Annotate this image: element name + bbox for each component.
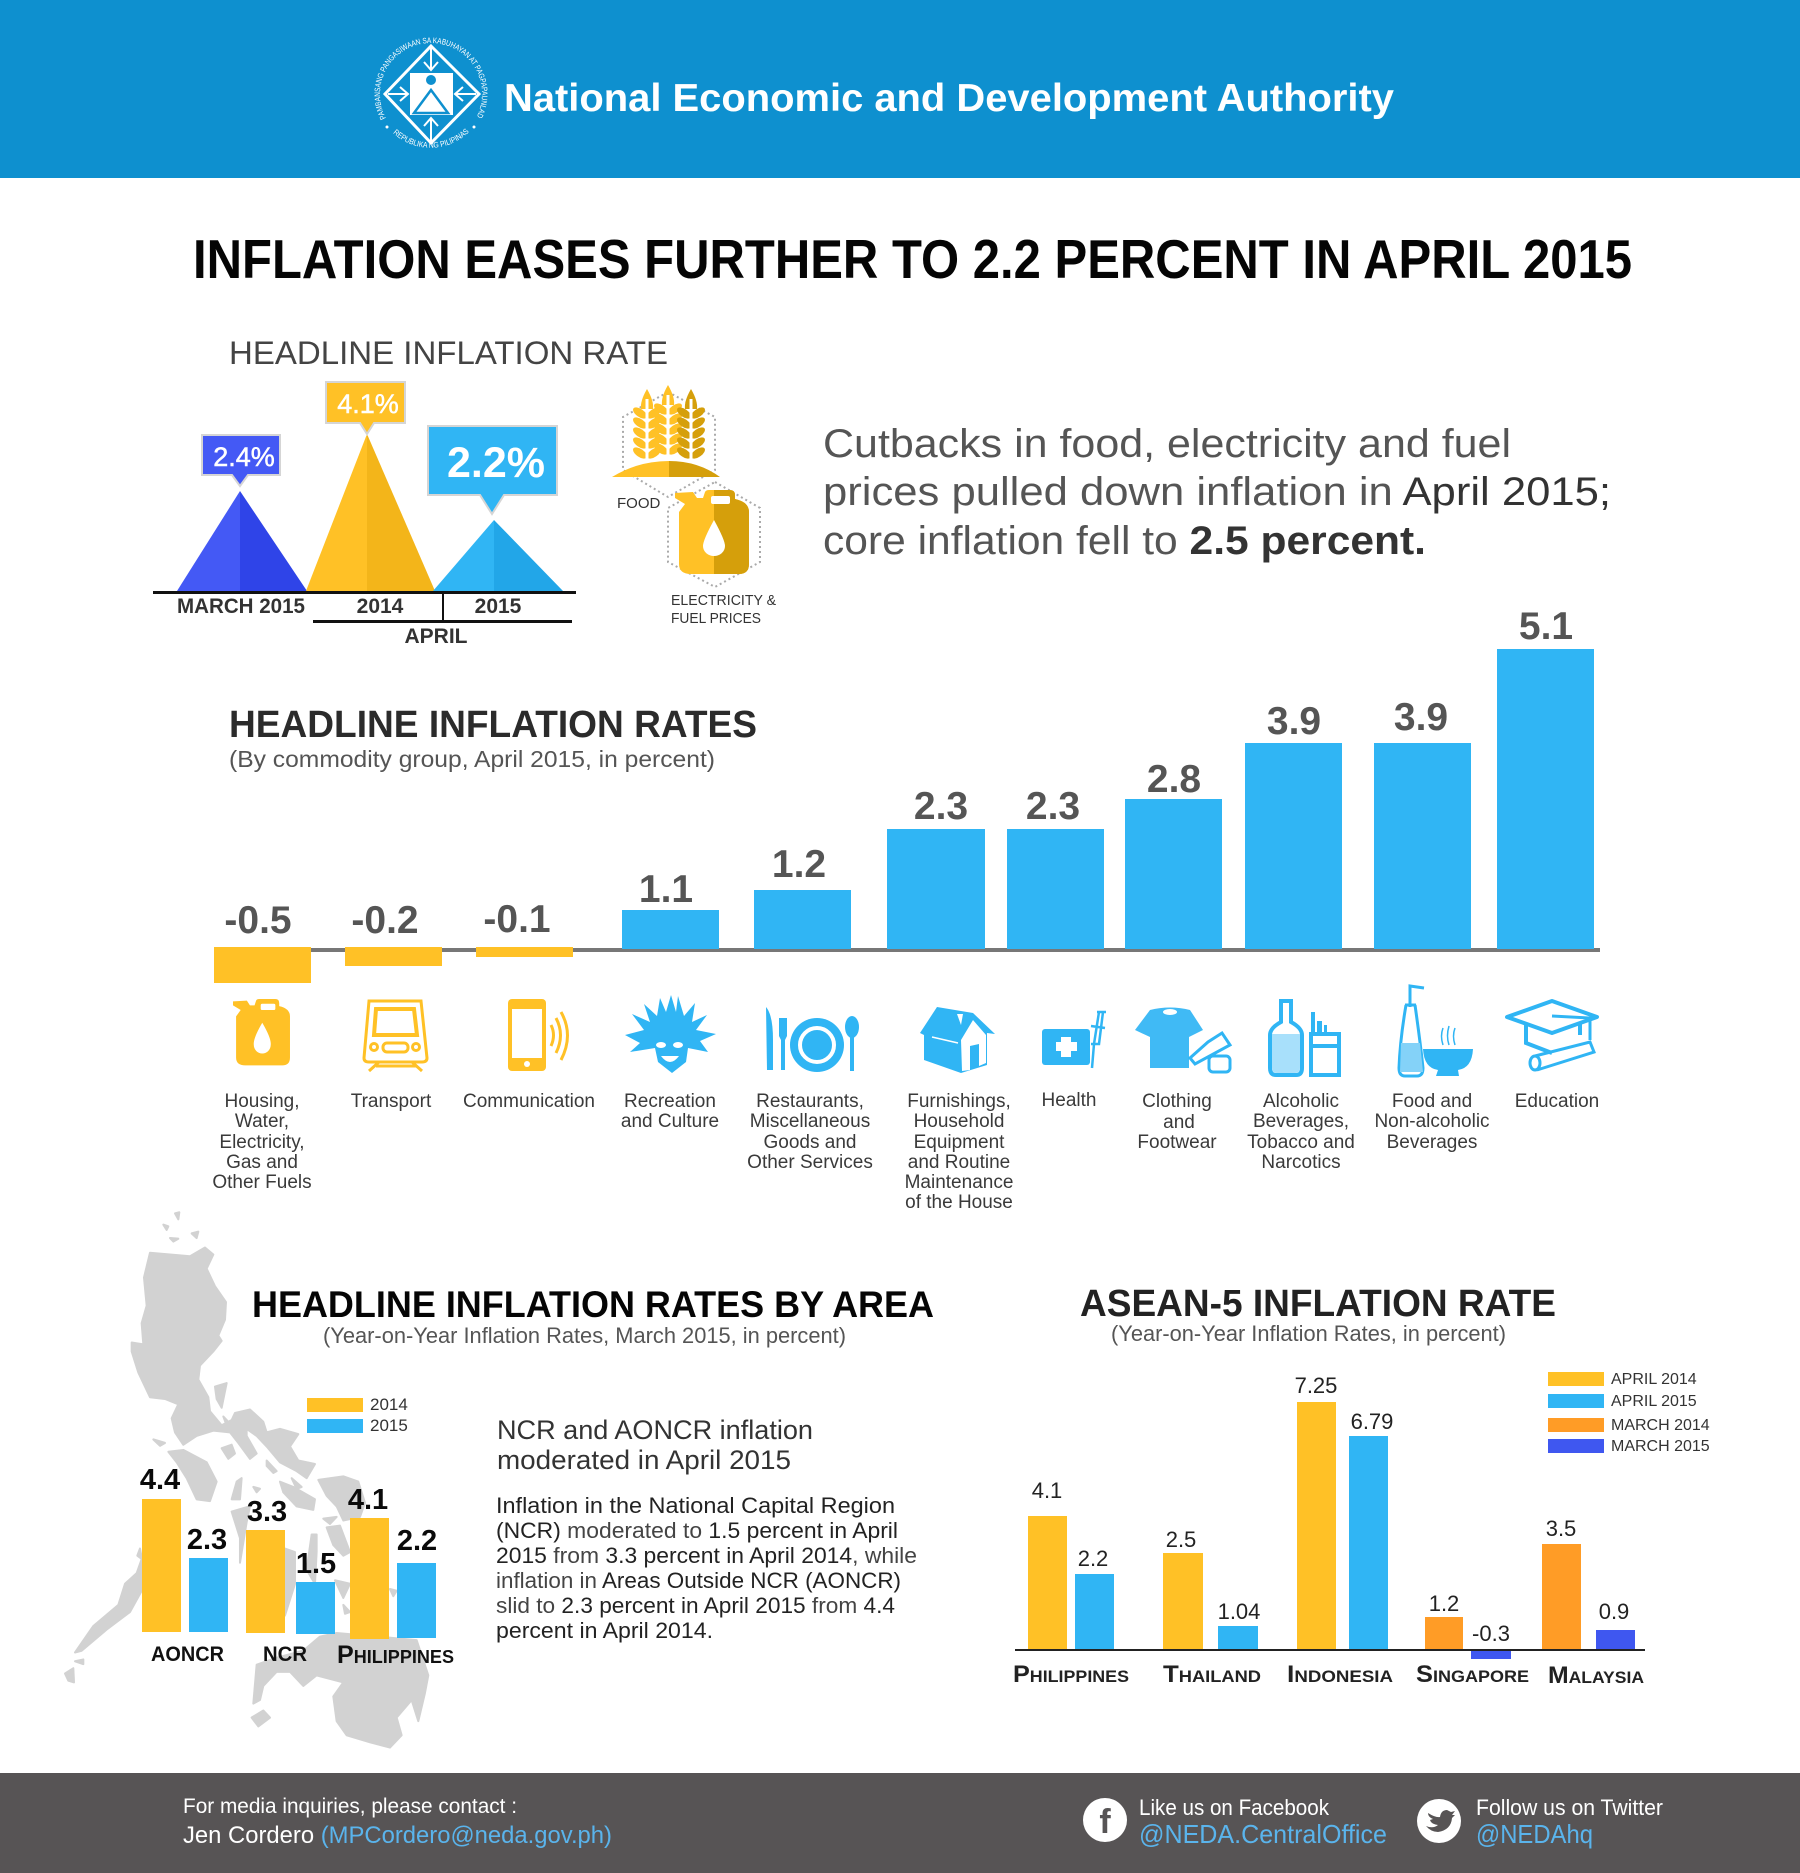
bar chart: commodity groups: -0.2: [351, 899, 419, 942]
facebook text: Like us on Facebook: [1139, 1795, 1330, 1820]
summary text: core inflation fell to 2.5 percent.: [823, 519, 1426, 563]
media contact: For media inquiries, please contact :: [183, 1795, 517, 1818]
bar chart: commodity groups: -0.1: [483, 898, 551, 941]
bar chart: commodity groups: 1.2: [772, 843, 826, 886]
commodity labels: Clothing: [1142, 1091, 1212, 1112]
legend: ASEAN: APRIL 2015: [1611, 1393, 1697, 1410]
commodity labels: Water,: [235, 1111, 289, 1132]
header band: [0, 0, 1800, 178]
callout 2.2%: [428, 426, 557, 514]
commodity labels: Household: [914, 1111, 1004, 1132]
bar chart: ASEAN: 3.5: [1546, 1516, 1576, 1541]
callout 4.1%: 4.1%: [337, 389, 399, 419]
commodity labels: Other Services: [747, 1152, 873, 1173]
bar chart: ASEAN: 7.25: [1295, 1373, 1337, 1398]
text: NCR and AONCR: (NCR) moderated to 1.5 percent in April: [496, 1518, 898, 1543]
icon: facebook: f: [1099, 1803, 1111, 1841]
axis labels: 2015: [475, 595, 522, 618]
text: NCR and AONCR: Inflation in the National Capital Region: [496, 1493, 895, 1518]
facebook text: @NEDA.CentralOffice: [1139, 1819, 1387, 1849]
heading: rates by area: HEADLINE INFLATION RATES BY AREA: [252, 1284, 934, 1325]
icon: graduation cap: [1507, 1001, 1597, 1070]
label: electricity and fuel prices: [671, 592, 776, 627]
triangle: April 2015: [433, 520, 563, 591]
bar chart: ASEAN: [1013, 1373, 1645, 1689]
icon: facebook: [1083, 1798, 1127, 1842]
legend: ASEAN: MARCH 2014: [1611, 1417, 1710, 1434]
commodity labels: [212, 1090, 1599, 1213]
bar chart: by area: NCR: [263, 1643, 307, 1666]
bar chart: commodity groups: [214, 605, 1600, 983]
bar chart: by area: 2.2: [397, 1525, 437, 1557]
commodity labels: Non-alcoholic: [1374, 1111, 1490, 1132]
subheading: area: (Year-on-Year Inflation Rates, March 2015, in percent): [323, 1323, 846, 1348]
icon: phone: [508, 999, 568, 1071]
icon: housing can: [233, 999, 290, 1065]
subheading: (By commodity group, April 2015, in percent): [229, 746, 715, 772]
text: NCR and AONCR: [496, 1415, 917, 1643]
commodity labels: Equipment: [914, 1132, 1005, 1153]
bar chart: ASEAN: Malaysia: [1548, 1662, 1644, 1689]
media contact: [183, 1795, 612, 1849]
commodity labels: Restaurants,: [756, 1091, 864, 1112]
commodity labels: Goods and: [764, 1132, 856, 1153]
commodity labels: Beverages: [1387, 1132, 1477, 1153]
facebook text: [1139, 1795, 1387, 1849]
twitter text: Follow us on Twitter: [1476, 1795, 1663, 1820]
commodity labels: Footwear: [1137, 1132, 1217, 1153]
callout 2.4%: [202, 435, 280, 486]
callout 2.2%: 2.2%: [447, 439, 545, 487]
legend: ASEAN: [1548, 1371, 1710, 1455]
bar chart: ASEAN: Philippines: [1013, 1661, 1129, 1688]
subheading: ASEAN: (Year-on-Year Inflation Rates, in percent): [1111, 1321, 1506, 1346]
axis labels: MARCH 2015: [177, 595, 305, 618]
text: NCR and AONCR: slid to 2.3 percent in April 2015 from 4.4: [496, 1593, 895, 1618]
commodity labels: Maintenance: [905, 1172, 1013, 1193]
legend: area chart: 2014: [370, 1395, 408, 1414]
commodity labels: Alcoholic: [1263, 1091, 1339, 1112]
commodity labels: Electricity,: [219, 1132, 305, 1153]
commodity labels: Beverages,: [1253, 1111, 1349, 1132]
bar chart: commodity groups: -0.5: [224, 899, 292, 942]
text: NCR and AONCR: NCR and AONCR inflation: [497, 1415, 813, 1445]
text: NCR and AONCR: percent in April 2014.: [496, 1618, 713, 1643]
bar chart: by area: 4.4: [140, 1464, 180, 1496]
commodity labels: Other Fuels: [212, 1172, 312, 1193]
bar chart: commodity groups: 2.3: [914, 785, 968, 828]
commodity labels: Recreation: [624, 1091, 716, 1112]
bar chart: commodity groups: 3.9: [1267, 700, 1321, 743]
text: NCR and AONCR: 2015 from 3.3 percent in April 2014 , while: [496, 1543, 917, 1568]
legend: area chart: [307, 1395, 408, 1435]
bar chart: by area: 4.1: [348, 1484, 388, 1516]
triangle: April 2014: [306, 434, 435, 591]
bar chart: by area: AONCR: [151, 1643, 224, 1666]
bar chart: by area: Philippines: [337, 1641, 454, 1669]
twitter text: [1476, 1795, 1663, 1849]
icon: festival mask: [625, 995, 716, 1073]
bar chart: by area: [140, 1464, 454, 1669]
label: electricity and fuel prices: ELECTRICITY &: [671, 592, 776, 609]
bar chart: ASEAN: -0.3: [1472, 1621, 1510, 1646]
text: NCR and AONCR: moderated in April 2015: [497, 1445, 791, 1475]
twitter text: @NEDAhq: [1476, 1819, 1593, 1849]
bar chart: commodity groups: 2.8: [1147, 758, 1201, 801]
icon: food wheat: [612, 385, 720, 497]
icon: alcohol and tobacco: [1270, 1001, 1339, 1075]
commodity labels: Health: [1042, 1090, 1096, 1111]
commodity labels: and Routine: [908, 1152, 1010, 1173]
text: NCR and AONCR: inflation in Areas Outside NCR (AONCR): [496, 1568, 901, 1593]
bar chart: ASEAN: 4.1: [1032, 1478, 1062, 1503]
heading: ASEAN-5: ASEAN-5 INFLATION RATE: [1080, 1283, 1556, 1325]
icon: bottle and bowl: [1399, 986, 1473, 1076]
bar chart: ASEAN: 2.2: [1078, 1546, 1108, 1571]
legend: ASEAN: APRIL 2014: [1611, 1371, 1697, 1388]
title: INFLATION EASES FURTHER TO 2.2 PERCENT IN APRIL 2015: [193, 228, 1632, 290]
bar chart: ASEAN: 0.9: [1599, 1599, 1629, 1624]
bar chart: by area: 2.3: [187, 1524, 227, 1556]
bar chart: ASEAN: Indonesia: [1287, 1661, 1393, 1688]
icon: train: [364, 1001, 427, 1071]
bar chart: ASEAN: Thailand: [1163, 1661, 1261, 1688]
panel: headline inflation rate triangles: [153, 335, 668, 648]
bar chart: commodity groups: 5.1: [1519, 605, 1573, 648]
bar chart: ASEAN: Singapore: [1416, 1661, 1529, 1688]
summary text: prices pulled down inflation in April 2015;: [823, 470, 1611, 514]
bar chart: ASEAN: 1.04: [1218, 1599, 1260, 1624]
icon: plate and cutlery: [766, 1007, 859, 1072]
callout 2.4%: 2.4%: [213, 442, 275, 472]
axis labels: [177, 595, 522, 648]
icon: fuel can: [668, 482, 760, 587]
icon: first aid and syringe: [1042, 1012, 1106, 1068]
legend: ASEAN: MARCH 2015: [1611, 1438, 1710, 1455]
bar chart: commodity groups: 1.1: [639, 868, 693, 911]
commodity labels: Education: [1515, 1091, 1599, 1112]
bar chart: by area: 1.5: [296, 1548, 336, 1580]
heading: HEADLINE INFLATION RATE: [229, 335, 668, 371]
triangle: March 2015: [177, 491, 307, 591]
commodity labels: Miscellaneous: [750, 1111, 870, 1132]
commodity labels: Furnishings,: [907, 1091, 1011, 1112]
heading: headline inflation rates: HEADLINE INFLATION RATES: [229, 704, 757, 746]
axis labels: APRIL: [404, 625, 468, 648]
commodity labels: and: [1163, 1112, 1195, 1133]
icon: house: [920, 1007, 995, 1073]
summary text: [823, 422, 1611, 563]
commodity labels: Housing,: [224, 1091, 300, 1112]
axis labels: 2014: [357, 595, 404, 618]
bar chart: ASEAN: 2.5: [1166, 1527, 1196, 1552]
callout 4.1%: [326, 382, 405, 434]
summary text: Cutbacks in food, electricity and fuel: [823, 422, 1511, 466]
header title: National Economic and Development Authority: [504, 77, 1394, 120]
bar chart: by area: 3.3: [247, 1496, 287, 1528]
bar chart: commodity groups: 2.3: [1026, 785, 1080, 828]
legend: area chart: 2015: [370, 1416, 408, 1435]
commodity labels: Transport: [351, 1091, 432, 1112]
commodity labels: and Culture: [621, 1111, 719, 1132]
media contact: Jen Cordero (MPCordero@neda.gov.ph): [183, 1822, 612, 1849]
commodity labels: Narcotics: [1261, 1152, 1341, 1173]
bar chart: commodity groups: 3.9: [1394, 696, 1448, 739]
commodity labels: Communication: [463, 1091, 595, 1112]
bar chart: ASEAN: 6.79: [1351, 1409, 1393, 1434]
icon: twitter: [1417, 1799, 1461, 1843]
icon: NEDA logo: REPUBLIKA NG PILIPINAS: [393, 128, 468, 148]
label: food: FOOD: [617, 495, 660, 512]
commodity labels: Food and: [1392, 1091, 1472, 1112]
icon: clothing and footwear: [1135, 1008, 1230, 1072]
bar chart: ASEAN: 1.2: [1429, 1591, 1459, 1616]
footer band: [0, 1773, 1800, 1873]
label: electricity and fuel prices: FUEL PRICES: [671, 610, 761, 627]
icon: NEDA logo: PAMBANSANG PANGASIWAAN SA KABUHAYAN AT PAGPAPAUNLAD: [374, 38, 488, 120]
commodity labels: of the House: [905, 1192, 1013, 1213]
commodity labels: Tobacco and: [1247, 1132, 1355, 1153]
map: Philippines: [65, 1212, 428, 1748]
commodity labels: Gas and: [226, 1152, 298, 1173]
